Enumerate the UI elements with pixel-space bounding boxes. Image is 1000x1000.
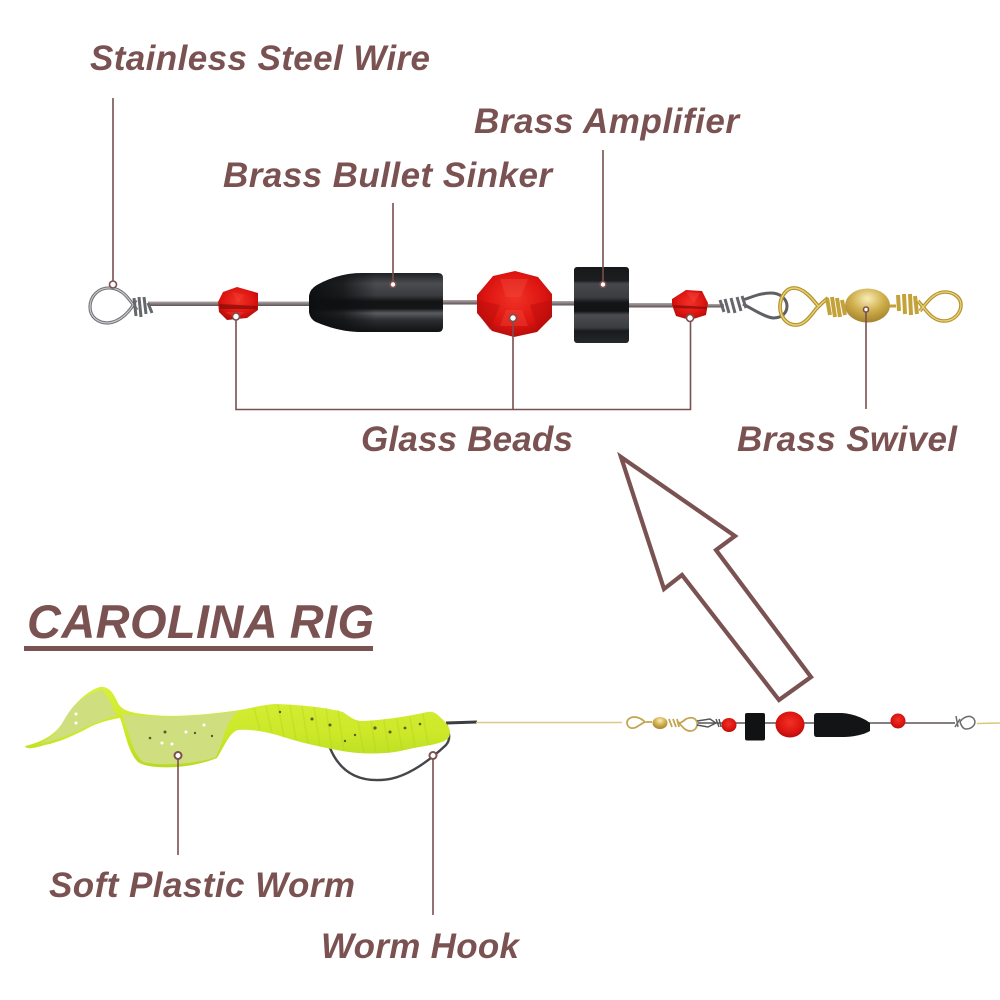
heading: Brass Swivel: Brass Swivel	[737, 420, 958, 459]
icon: worm hook	[330, 722, 477, 780]
arrow: pointing up to enlarged rig	[621, 457, 811, 700]
icon: small amplifier	[745, 713, 765, 740]
worm tail translucent	[40, 690, 238, 764]
icon: small bead	[722, 718, 736, 732]
icon: medium bead	[776, 712, 804, 738]
heading: Stainless Steel Wire: Stainless Steel Wire	[90, 39, 430, 78]
label: Worm Hook: Worm Hook	[321, 927, 521, 966]
icon: brass bullet sinker	[309, 273, 443, 332]
heading: Glass Beads: Glass Beads	[361, 420, 573, 459]
worm sparkles	[74, 712, 206, 746]
leader lines: worm and hook callouts	[174, 752, 436, 915]
title: CAROLINA RIG: CAROLINA RIG	[27, 595, 374, 648]
label: Soft Plastic Worm: Soft Plastic Worm	[49, 866, 355, 905]
icon: small red bead right	[672, 290, 708, 320]
worm speckles	[149, 711, 421, 742]
icon: wire loop	[90, 288, 152, 323]
steel wire	[698, 722, 955, 724]
fishing line	[476, 722, 622, 724]
icon: small swivel	[627, 717, 697, 731]
icon: small wire loop	[955, 716, 975, 729]
icon: small wire wrap	[697, 719, 721, 727]
icon: steel wrap and loop	[720, 293, 787, 318]
end line	[977, 722, 1000, 724]
icon: soft plastic worm	[25, 687, 450, 767]
title underline	[24, 646, 373, 651]
diagram: enlarged rig	[90, 267, 961, 343]
icon: brass amplifier	[574, 267, 629, 343]
icon: large red bead	[477, 271, 552, 337]
wire	[148, 300, 724, 308]
leader lines: upper rig callouts	[110, 98, 868, 410]
icon: small sinker	[814, 713, 870, 737]
worm body ridges	[254, 705, 428, 753]
icon: brass swivel	[780, 288, 961, 325]
icon: small red bead left	[218, 287, 258, 320]
diagram: full rig line	[476, 712, 1000, 740]
heading: Brass Amplifier: Brass Amplifier	[474, 102, 741, 141]
icon: small end bead	[890, 714, 906, 728]
heading: Brass Bullet Sinker: Brass Bullet Sinker	[223, 156, 554, 195]
